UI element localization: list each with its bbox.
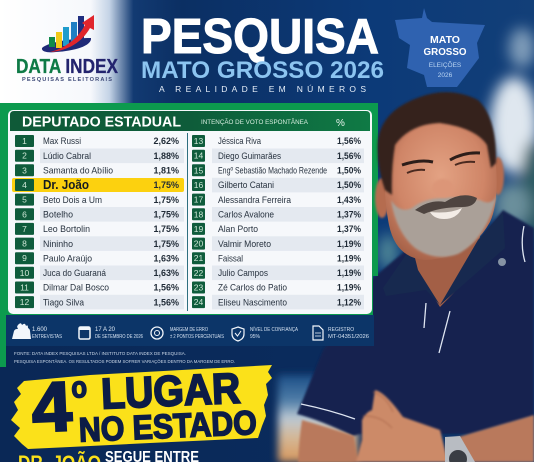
row 24: 24 (194, 297, 203, 307)
row 15: Engº Sebastião Machado Rezende (218, 166, 327, 176)
row 20: 1,19% (337, 239, 361, 250)
row 9: Paulo Araújo (43, 253, 92, 264)
row 7 (15, 223, 180, 235)
row 14: Diego Guimarães (218, 151, 281, 162)
logo: Data Index (16, 15, 119, 83)
headline: º (70, 370, 89, 427)
stat: dates: DE SETEMBRO DE 2026 (95, 334, 143, 340)
nose (432, 179, 454, 197)
face (385, 120, 497, 260)
row 6: 1,75% (154, 210, 180, 220)
row 12 (15, 296, 180, 308)
stat: confidence level: NÍVEL DE CONFIANÇA (250, 326, 299, 333)
row 7: 7 (22, 224, 27, 234)
row 5 (15, 194, 180, 206)
stat: interviews: ENTREVISTAS (32, 334, 63, 340)
row 9: 1,63% (154, 253, 180, 264)
row 17 (192, 194, 361, 206)
ears (375, 157, 504, 218)
table header: % (336, 118, 345, 129)
row 14 (192, 150, 361, 162)
row 3: Samanta do Abílio (43, 166, 113, 176)
row 10 (15, 267, 180, 279)
row 18 (192, 208, 361, 220)
row 4: 4 (22, 180, 27, 190)
row 7: Leo Bortolin (43, 224, 90, 235)
row 8: 1,75% (154, 239, 180, 250)
row 7: 1,75% (154, 224, 180, 235)
row 2 (15, 150, 180, 162)
row 19: Alan Porto (218, 224, 258, 235)
row 19 (192, 223, 361, 235)
hair (378, 92, 496, 195)
row 3 (15, 164, 180, 176)
column divider (187, 133, 188, 311)
row 15: 15 (194, 165, 203, 175)
row 16: Gilberto Catani (218, 180, 274, 191)
row 13: 1,56% (337, 136, 361, 147)
row 8: Nininho (43, 239, 73, 250)
row 11: 11 (20, 282, 29, 292)
row 11 (15, 282, 180, 294)
stat: interviews (12, 323, 63, 340)
row 24: 1,12% (337, 297, 361, 308)
row 14: 1,56% (337, 151, 361, 162)
row 17: 1,43% (337, 195, 361, 206)
row 5: 5 (22, 195, 27, 205)
row 3: 1,81% (154, 166, 180, 176)
row 4 (15, 178, 180, 192)
stat: margin of error (151, 327, 225, 340)
stat: margin of error: MARGEM DE ERRO (170, 327, 208, 333)
row 19: 19 (194, 224, 203, 234)
row 22: 22 (194, 268, 203, 278)
row 24: Eliseu Nascimento (218, 297, 287, 308)
row 6: 6 (22, 209, 27, 219)
stat: registration: MT-04351/2026 (328, 334, 369, 340)
row 20: 20 (194, 239, 203, 249)
headline: 4 (30, 367, 74, 447)
row 4: Dr. João (43, 178, 89, 192)
row 2: 2 (22, 151, 27, 161)
row 23: Zé Carlos do Patio (218, 283, 287, 294)
neck (410, 235, 480, 307)
row 9: 9 (22, 253, 27, 263)
heading: pesquisa: PESQUISA (141, 10, 379, 64)
row 1: 1 (22, 136, 27, 146)
map badge: Mato Grosso: 2026 (438, 72, 453, 79)
icon: bar chart with rising arrow (42, 15, 94, 52)
row 11: Dilmar Dal Bosco (43, 283, 109, 294)
row 10: 10 (20, 268, 29, 278)
row 2: 1,88% (154, 151, 180, 162)
row 4: 1,75% (154, 180, 180, 191)
row 10: 1,63% (154, 268, 180, 279)
table header (10, 111, 370, 131)
row 1: Max Russi (43, 136, 81, 147)
banner: 4º lugar no estado (11, 359, 272, 452)
beard (391, 190, 498, 257)
row 23: 1,19% (337, 283, 361, 294)
row 22: 1,19% (337, 268, 361, 279)
smile (430, 208, 462, 219)
row 12: Tiago Silva (43, 297, 85, 308)
row 21 (192, 252, 361, 264)
row 18: Carlos Avalone (218, 210, 274, 220)
source note: PESQUISA ESPONTÂNEA. OS RESULTADOS PODEM SOFRER VARIAÇÕES DENTRO DA MARGEM DE ERRO. (14, 358, 235, 365)
stat: confidence level: 95% (250, 334, 261, 340)
map badge: Mato Grosso (395, 8, 485, 87)
person: body (297, 210, 534, 462)
map badge: Mato Grosso: ELEIÇÕES (429, 60, 462, 69)
headline: NO ESTADO (78, 404, 258, 450)
shirt trim (301, 226, 525, 419)
row 19: 1,37% (337, 224, 361, 235)
row 22: Julio Campos (218, 268, 268, 279)
headline (30, 359, 258, 452)
row 8 (15, 238, 180, 250)
arms and hands (298, 390, 534, 462)
row 20: Valmir Moreto (218, 239, 271, 250)
row 18: 18 (194, 209, 203, 219)
row 21: 1,19% (337, 253, 361, 264)
callout: Dr. João segue entre (18, 449, 199, 462)
source note (14, 351, 235, 365)
row 13: 13 (194, 136, 203, 146)
row 14: 14 (194, 151, 203, 161)
eyes (407, 162, 475, 173)
row 18: 1,37% (337, 210, 361, 220)
moustache (415, 195, 477, 214)
row 10: Juca do Guaraná (43, 268, 107, 279)
eyebrows (402, 153, 480, 165)
collar pin (498, 258, 506, 266)
row 13 (192, 135, 361, 147)
row 8: 8 (22, 239, 27, 249)
shirt (297, 210, 534, 436)
subtitle: A REALIDADE EM NÚMEROS (159, 84, 366, 94)
row 17: Alessandra Ferreira (218, 195, 292, 206)
row 24 (192, 296, 361, 308)
row 22 (192, 267, 361, 279)
map badge: Mato Grosso: MATO (430, 34, 460, 46)
row stripes (40, 148, 364, 309)
row 6 (15, 208, 180, 220)
stat: interviews: 1.600 (32, 327, 48, 333)
panel: ranking table (0, 103, 378, 367)
stat: dates (79, 327, 143, 340)
row 5: 1,75% (154, 195, 180, 206)
headline: LUGAR (100, 365, 241, 419)
row 12: 1,56% (154, 297, 180, 308)
logo tagline: PESQUISAS ELEITORAIS (22, 77, 112, 83)
row 13: Jéssica Riva (218, 136, 262, 147)
stat: registration (313, 326, 369, 340)
row 20 (192, 238, 361, 250)
table header: DEPUTADO ESTADUAL (22, 114, 181, 130)
stat: registration: REGISTRO (328, 327, 354, 333)
person: head (375, 92, 504, 260)
row 1: 2,62% (154, 136, 180, 147)
table header: INTENÇÃO DE VOTO ESPONTÂNEA (201, 119, 308, 126)
row 2: Lúdio Cabral (43, 151, 91, 162)
row 21: 21 (194, 253, 203, 263)
row 1 (15, 135, 180, 147)
yellow brush stroke (11, 365, 272, 449)
collar (383, 212, 505, 305)
row 5: Beto Dois a Um (43, 195, 102, 206)
row 6: Botelho (43, 210, 73, 220)
row 16: 16 (194, 180, 203, 190)
stats band (6, 315, 374, 346)
row 17: 17 (194, 195, 203, 205)
row 21: Faissal (218, 253, 243, 264)
row 3: 3 (22, 165, 27, 175)
map badge: Mato Grosso: GROSSO (424, 46, 466, 58)
stat: margin of error: ± 2 PONTOS PERCENTUAIS (170, 334, 225, 340)
stat: dates: 17 A 20 (95, 327, 116, 333)
row 16 (192, 179, 361, 191)
highlight: rank 4 Dr. João (12, 178, 184, 192)
source note: FONTE: DATA INDEX PESQUISAS LTDA / INSTITUTO DATA INDEX DE PESQUISA. (14, 351, 186, 357)
row 11: 1,56% (154, 283, 180, 294)
logo wordmark: DATA INDEX (16, 56, 119, 78)
title (141, 10, 384, 94)
row 16: 1,50% (337, 180, 361, 191)
row 15: 1,50% (337, 166, 361, 176)
row 23 (192, 282, 361, 294)
row 9 (15, 252, 180, 264)
row 23: 23 (194, 282, 203, 292)
row 12: 12 (20, 297, 29, 307)
stat: confidence level (232, 326, 299, 341)
heading: mato grosso 2026: MATO GROSSO 2026 (141, 57, 384, 84)
watch (445, 436, 475, 462)
